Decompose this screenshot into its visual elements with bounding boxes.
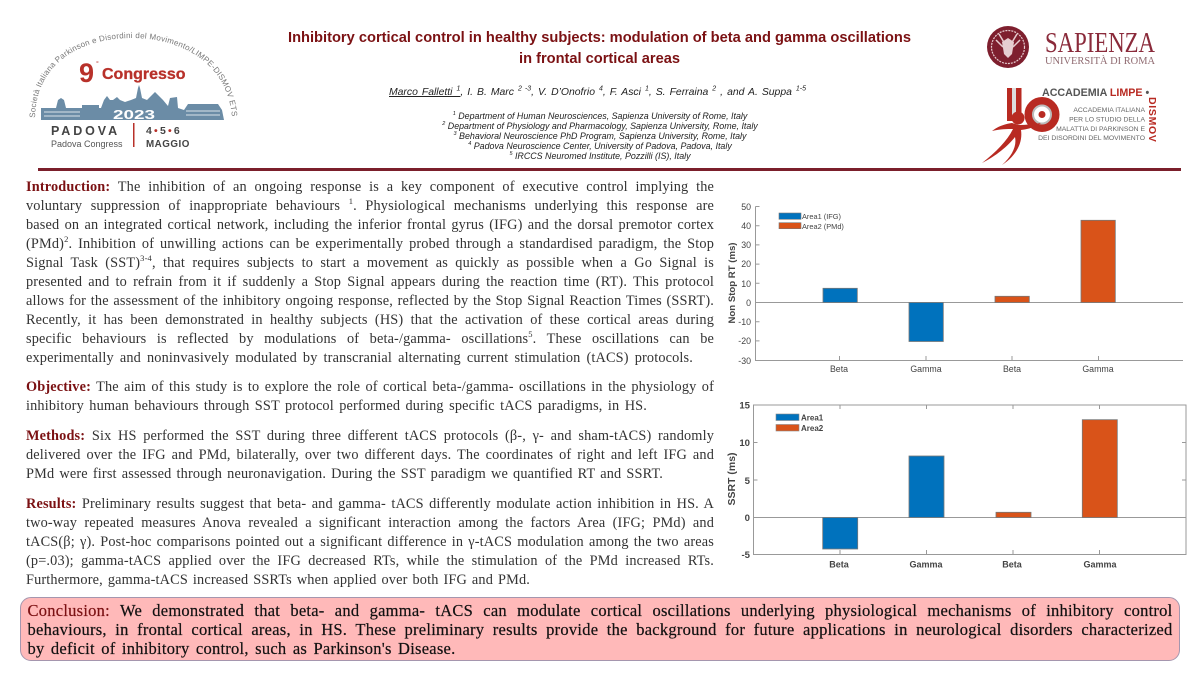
chart: Non Stop RT bar chart xyxy=(727,202,1183,374)
affiliations: 3 Behavioral Neuroscience PhD Program, Sapienza University, Rome, Italy xyxy=(454,131,746,141)
text block: introduction: based on an integrated cortical network, including the inferior frontal gyrus (IFG) and the dorsal premotor cortex xyxy=(26,217,714,233)
text block: objective: Objective: The aim of this study is to explore the role of cortical beta-/gamma- oscillations in the physiology of xyxy=(26,379,714,395)
axis labels: 50 xyxy=(741,202,751,212)
text block: objective: inhibitory human behaviours through SST protocol performed during specific tACS paradigms, in HS. xyxy=(26,398,647,414)
text block: introduction: specific behaviours is reflected by modulations of beta-/gamma- oscillations5. These oscillations can be xyxy=(26,329,714,347)
affiliations: 2 Department of Physiology and Pharmacology, Sapienza University, Rome, Italy xyxy=(442,121,758,131)
axis labels: -10 xyxy=(738,317,751,327)
logo: Accademia LIMPE-DISMOV: MALATTIA DI PARKINSON E xyxy=(1056,126,1145,133)
callout: conclusion: Conclusion: We demonstrated that beta- and gamma- tACS can modulate cortical oscillations underlying physiological mechanisms of inhibitory control xyxy=(28,601,1172,620)
legend: Area1 xyxy=(801,414,824,422)
axis labels: 40 xyxy=(741,221,751,231)
text block: methods: Methods: Six HS performed the SST during three different tACS protocols (β-, γ- and sham-tACS) randomly xyxy=(26,428,714,444)
text block: methods: PMd were first assessed through neuronavigation. During the SST paradigm we quantified RT and SSRT. xyxy=(26,466,663,482)
chart: Non Stop RT bar chart: Non Stop RT (ms) xyxy=(727,242,738,324)
text block: methods xyxy=(26,428,714,482)
text block: results: two-way repeated measures Anova revealed a significant interaction among the factors Area (IFG; PMd) and xyxy=(26,515,714,531)
logo: Accademia LIMPE-DISMOV: DEI DISORDINI DEL MOVIMENTO xyxy=(1038,135,1145,142)
logo: 9th Congresso Padova 2023: 2023 xyxy=(113,107,155,122)
axis labels: 0 xyxy=(745,513,750,524)
text block: results: tACS(β; γ). Post-hoc comparisons pointed out a significant difference in γ-tACS modulation among the two areas xyxy=(26,534,714,550)
logo: 9th Congresso Padova 2023: Società Italiana Parkinson e Disordini del Movimento/LIMPE-DISMOV ETS xyxy=(30,32,238,118)
bars xyxy=(823,220,1115,342)
axis labels: -5 xyxy=(741,550,751,561)
text block: objective xyxy=(26,379,714,414)
chart: Non Stop RT bar chart: Beta xyxy=(830,364,848,374)
text block: introduction xyxy=(26,179,714,366)
axis labels: 5 xyxy=(745,476,751,487)
axis labels: 15 xyxy=(739,400,751,412)
title xyxy=(288,29,911,67)
axis labels: 10 xyxy=(741,279,751,289)
chart: Non Stop RT bar chart: Gamma xyxy=(1082,364,1114,374)
logo: 9th Congresso Padova 2023: 4•5•6 xyxy=(146,125,182,137)
axis labels: 0 xyxy=(746,298,751,308)
affiliations: 4 Padova Neuroscience Center, University of Padova, Padova, Italy xyxy=(468,141,732,151)
authors: Marco Falletti 1, I. B. Marc 2 -3, V. D’Onofrio 4, F. Asci 1, S. Ferraina 2 , and A. Suppa 1-5 xyxy=(389,86,806,98)
text block: results xyxy=(26,496,714,588)
chart: SSRT bar chart: Gamma xyxy=(909,560,943,570)
affiliations: 5 IRCCS Neuromed Institute, Pozzilli (IS), Italy xyxy=(509,151,691,161)
logo: Accademia LIMPE-DISMOV: PER LO STUDIO DELLA xyxy=(1069,117,1145,124)
legend: Area1 (IFG) xyxy=(802,212,841,221)
logo: Accademia LIMPE-DISMOV: DISMOV xyxy=(1146,97,1158,143)
legend: Area2 xyxy=(801,424,824,433)
logo: 9th Congresso Padova 2023: PADOVA xyxy=(51,124,120,138)
text block: introduction: voluntary suppression of inappropriate behaviours 1. Physiological mechanisms underlying this response are xyxy=(26,196,714,214)
text block: introduction: allows for the assessment of the inhibitory ongoing response, reflected by the Stop Signal Reaction Times (SSRT). xyxy=(26,293,714,309)
logo: Sapienza Università di Roma: UNIVERSITÀ DI ROMA xyxy=(1045,55,1155,67)
text block: introduction: experimentally and noninvasively modulated by transcranial alternating current stimulation (tACS) protocols. xyxy=(26,350,693,366)
axis labels: -20 xyxy=(738,336,751,346)
title: Inhibitory cortical control in healthy subjects: modulation of beta and gamma oscillations xyxy=(288,29,911,46)
text block: introduction: (PMd)2. Inhibition of unwilling actions can be experimentally probed through a standardised paradigm, the Stop xyxy=(26,234,714,252)
text block: results: (p=.03); gamma-tACS applied over the IFG decreased RTs, while the stimulation of the PMd increased RTs. xyxy=(26,553,714,569)
text block: introduction: Signal Task (SST)3-4, that requires subjects to start a movement as quickly as possible when a Go Signal is xyxy=(26,253,714,271)
text block: methods: delivered over the IFG and PMd, bilaterally, over two different days. The coordinates of right and left IFG and xyxy=(26,447,714,463)
axis labels xyxy=(739,400,751,561)
axis labels: 30 xyxy=(741,240,751,250)
callout: conclusion xyxy=(20,597,1180,661)
callout: conclusion: by deficit of inhibitory control, such as Parkinson's Disease. xyxy=(28,639,456,658)
logo: 9th Congresso Padova 2023: 9 xyxy=(79,58,94,88)
logo: Accademia LIMPE-DISMOV xyxy=(982,87,1158,165)
text block: introduction: Introduction: The inhibition of an ongoing response is a key component of executive control implying the xyxy=(26,179,714,195)
chart: Non Stop RT bar chart: Gamma xyxy=(910,364,942,374)
logo: 9th Congresso Padova 2023: Congresso xyxy=(102,66,186,83)
chart: SSRT bar chart: Beta xyxy=(1002,560,1023,570)
affiliations xyxy=(442,111,758,161)
text block: introduction: Recently, it has been demonstrated in healthy subjects (HS) that the activation of these cortical areas during xyxy=(26,312,714,328)
callout: conclusion: behaviours, in frontal cortical areas, in HS. These preliminary results provide the background for future applications in neurological disorders characterized xyxy=(28,620,1172,639)
logo: Accademia LIMPE-DISMOV: ACCADEMIA LIMPE • xyxy=(1042,87,1150,99)
chart: SSRT bar chart: SSRT (ms) xyxy=(726,452,738,506)
legend xyxy=(776,414,824,433)
chart: SSRT bar chart: Beta xyxy=(829,560,850,570)
axis labels: 20 xyxy=(741,259,751,269)
chart: SSRT bar chart: Gamma xyxy=(1083,560,1117,570)
text block: results: Furthermore, gamma-tACS increased SSRTs when applied over both IFG and PMd. xyxy=(26,572,530,588)
chart: SSRT bar chart xyxy=(726,400,1186,570)
logo: 9th Congresso Padova 2023: ° xyxy=(96,60,99,68)
chart: Non Stop RT bar chart: Beta xyxy=(1003,364,1021,374)
logo: 9th Congresso Padova 2023: Padova Congress xyxy=(51,139,123,149)
axis labels xyxy=(738,202,751,366)
legend xyxy=(779,212,844,231)
text block: introduction: presented and to refrain from it if suddenly a Stop Signal appears during the reaction time (RT). This protocol xyxy=(26,274,714,290)
axis labels: -30 xyxy=(738,356,751,366)
axis labels: 10 xyxy=(739,438,750,449)
logo: Sapienza Università di Roma xyxy=(987,26,1156,68)
title: in frontal cortical areas xyxy=(519,50,680,67)
bars xyxy=(823,420,1117,549)
legend: Area2 (PMd) xyxy=(802,222,844,231)
text block: results: Results: Preliminary results suggest that beta- and gamma- tACS differently modulate action inhibition in HS. A xyxy=(26,496,714,512)
logo: Accademia LIMPE-DISMOV: ACCADEMIA ITALIANA xyxy=(1073,107,1145,114)
logo: 9th Congresso Padova 2023: MAGGIO xyxy=(146,139,190,150)
affiliations: 1 Department of Human Neurosciences, Sapienza University of Rome, Italy xyxy=(453,111,747,121)
